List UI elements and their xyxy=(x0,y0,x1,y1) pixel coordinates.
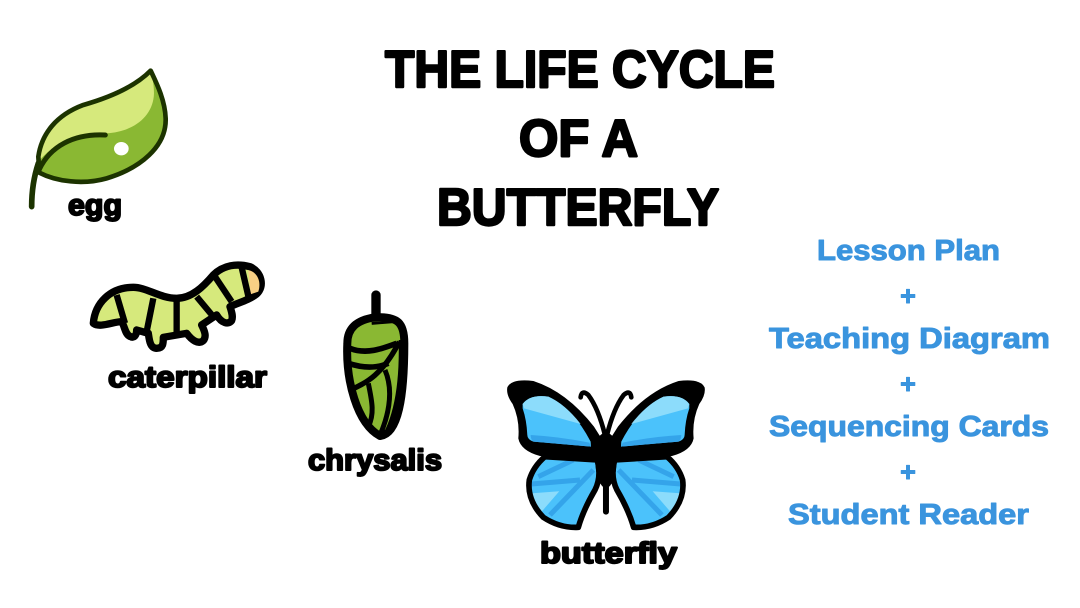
icon: butterfly xyxy=(507,380,705,527)
resource list: + xyxy=(900,457,916,487)
resource list xyxy=(769,235,1050,531)
label: caterpillar: caterpillar xyxy=(108,361,267,394)
icon: chrysalis xyxy=(347,295,404,436)
resource list: + xyxy=(900,369,916,399)
title: BUTTERFLY xyxy=(437,179,719,237)
icon: leaf with egg xyxy=(32,71,166,207)
title: OF A xyxy=(519,110,638,168)
label: chrysalis: chrysalis xyxy=(308,444,442,477)
resource list: + xyxy=(900,281,916,311)
icon: caterpillar xyxy=(93,265,261,348)
resource list: Sequencing Cards xyxy=(769,411,1049,443)
resource list: Student Reader xyxy=(788,499,1029,531)
resource list: Teaching Diagram xyxy=(769,323,1050,355)
label: butterfly: butterfly xyxy=(540,537,677,570)
label: egg: egg xyxy=(68,189,122,222)
title: THE LIFE CYCLE xyxy=(385,41,775,99)
resource list: Lesson Plan xyxy=(817,235,1000,267)
title xyxy=(385,41,775,237)
